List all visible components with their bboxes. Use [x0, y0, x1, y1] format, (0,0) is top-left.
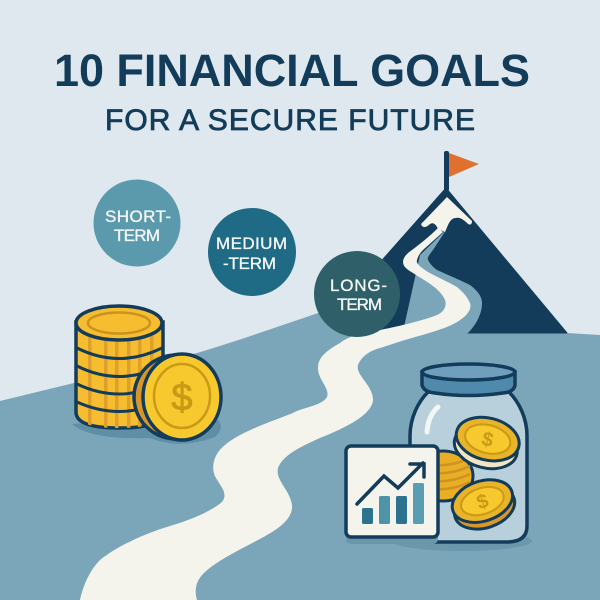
large dollar coin [134, 355, 218, 439]
lower coin in jar [447, 472, 520, 536]
path shadow band [400, 230, 482, 345]
top coin [76, 306, 162, 340]
badge: short-term: TERM [114, 226, 160, 245]
subtitle: FOR A SECURE FUTURE [105, 104, 475, 137]
jar glass [410, 392, 527, 542]
icon: growth chart card [346, 446, 438, 544]
flag pole [444, 151, 449, 191]
icon: coin stack [72, 306, 221, 444]
card [346, 446, 438, 537]
mountain body [345, 188, 567, 333]
badge: medium-term [208, 208, 296, 296]
glass highlight [427, 407, 438, 432]
icon: coin stack: $ [171, 377, 193, 419]
badge: medium-term: -TERM [223, 254, 276, 273]
stacked coin sides [76, 322, 163, 428]
winding path [80, 228, 471, 600]
snow cap [421, 197, 472, 232]
ground hill [0, 305, 600, 600]
upper coin in jar [450, 411, 524, 475]
badge: long-term: LONG- [330, 276, 387, 295]
badge: short-term [94, 180, 180, 266]
mountain with flag and snow [345, 151, 567, 333]
jar shadow [392, 531, 532, 551]
flag [449, 153, 479, 177]
badge: long-term [314, 251, 400, 337]
card shadow [346, 532, 438, 544]
badge: short-term: SHORT- [105, 207, 171, 226]
upper coin in jar: $ [479, 428, 496, 452]
badge: medium-term: MEDIUM [216, 234, 287, 253]
trend arrow [357, 463, 424, 504]
jar lid [422, 372, 515, 396]
middle striped coin [413, 451, 473, 501]
title: 10 FINANCIAL GOALS [54, 45, 530, 96]
badge: long-term: TERM [337, 295, 382, 314]
coin shadow [72, 420, 221, 444]
chart bars [362, 508, 373, 524]
lower coin in jar: $ [474, 490, 491, 514]
icon: savings jar [392, 364, 532, 551]
